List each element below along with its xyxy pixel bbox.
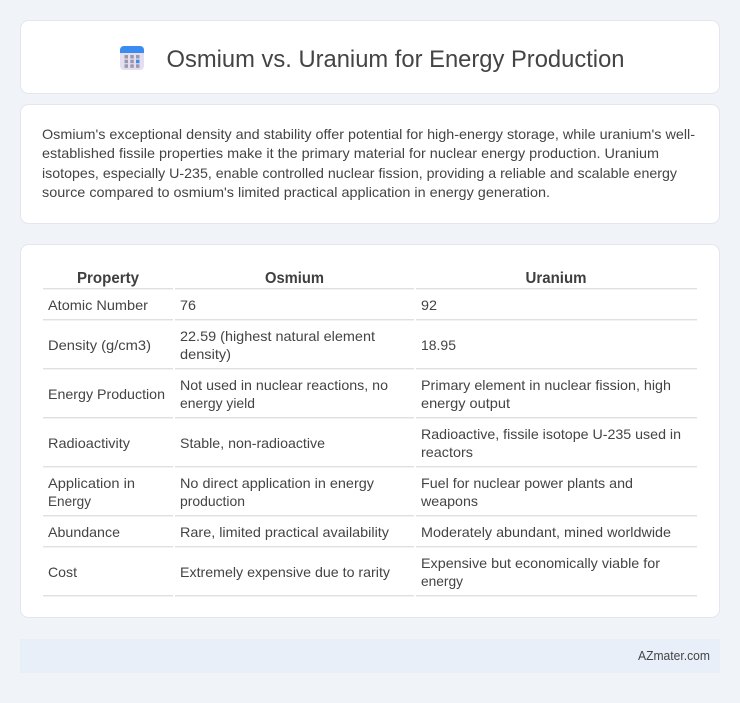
footer credit: AZmater.com <box>638 649 710 663</box>
row: energy production <box>48 377 671 411</box>
row: radioactivity: reactors <box>421 444 473 460</box>
row: atomic number: Atomic Number <box>48 297 148 313</box>
row: abundance <box>48 524 671 540</box>
row: density: density) <box>180 346 231 362</box>
row: application in energy: Fuel for nuclear power plants and <box>421 475 633 491</box>
row: abundance: Abundance <box>48 524 120 540</box>
row: cost: Cost <box>48 564 77 580</box>
summary text <box>42 126 695 200</box>
row: cost <box>48 555 660 589</box>
row: density: 18.95 <box>421 337 456 353</box>
footer <box>20 639 720 673</box>
panel: comparison table <box>20 244 720 618</box>
row: application in energy: weapons <box>420 493 478 509</box>
summary text: established fissile properties make it the primary material for nuclear energy production. Uranium <box>42 145 659 161</box>
row: radioactivity: Stable, non-radioactive <box>180 435 325 451</box>
row: cost: Extremely expensive due to rarity <box>180 564 390 580</box>
row: density: Density (g/cm3) <box>48 337 151 353</box>
table header <box>77 270 586 287</box>
row: cost: energy <box>421 573 463 589</box>
table header: Osmium <box>265 270 324 287</box>
summary text: Osmium's exceptional density and stability offer potential for high-energy storage, while uranium's well- <box>42 126 695 142</box>
row: abundance: Moderately abundant, mined worldwide <box>421 524 671 540</box>
row: atomic number <box>48 297 437 313</box>
panel: summary <box>20 104 720 224</box>
summary text: isotopes, especially U-235, enable controlled nuclear fission, providing a reliable and scalable energy <box>42 165 677 181</box>
row: application in energy: Energy <box>48 493 91 509</box>
row: abundance: Rare, limited practical availability <box>180 524 389 540</box>
row: energy production: Not used in nuclear reactions, no <box>180 377 388 393</box>
icon: calendar <box>120 46 144 70</box>
panel: title <box>20 20 720 94</box>
row: application in energy: Application in <box>48 475 135 491</box>
row: energy production: energy yield <box>180 395 255 411</box>
row: energy production: Energy Production <box>48 386 165 402</box>
table header: Property <box>77 270 139 287</box>
row: density: 22.59 (highest natural element <box>180 328 375 344</box>
row: radioactivity: Radioactive, fissile isotope U-235 used in <box>421 426 681 442</box>
row: energy production: energy output <box>421 395 510 411</box>
row: atomic number: 92 <box>421 297 437 313</box>
row: cost: Expensive but economically viable for <box>421 555 660 571</box>
title: Osmium vs. Uranium for Energy Production <box>166 46 624 73</box>
table header: Uranium <box>526 270 586 287</box>
row: radioactivity: Radioactivity <box>48 435 130 451</box>
summary text: source compared to osmium's limited practical application in energy generation. <box>42 184 550 200</box>
row: application in energy: production <box>180 493 245 509</box>
row: radioactivity <box>48 426 681 460</box>
row: application in energy <box>48 475 633 509</box>
row: atomic number: 76 <box>180 297 196 313</box>
table row rules <box>43 288 697 596</box>
row: density <box>48 328 456 362</box>
row: energy production: Primary element in nuclear fission, high <box>421 377 671 393</box>
row: application in energy: No direct application in energy <box>180 475 374 491</box>
